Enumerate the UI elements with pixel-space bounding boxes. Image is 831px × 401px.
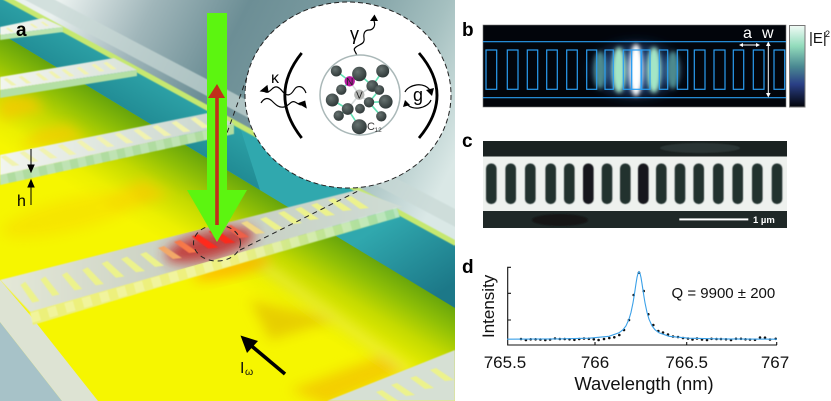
label: a: a bbox=[16, 20, 27, 41]
arrow: current I omega: ω bbox=[245, 366, 253, 378]
data: fitted Lorentzian curve bbox=[507, 272, 777, 339]
icon: right mirror bbox=[419, 53, 437, 138]
diagram: NV centre in diamond lattice: N bbox=[346, 77, 353, 88]
text: kappa: κ bbox=[271, 70, 280, 87]
text: x-axis title: Wavelength (nm) bbox=[574, 373, 714, 394]
scale bar: 1 µm: 1 µm bbox=[753, 215, 775, 226]
arrows: height h bbox=[17, 149, 34, 210]
icon: gamma emission wave bbox=[346, 14, 378, 62]
label: b: b bbox=[462, 20, 474, 41]
scale bar: 1 µm bbox=[679, 215, 775, 226]
panel d: resonance spectrum chart bbox=[479, 267, 789, 394]
text: gamma: γ bbox=[350, 24, 359, 44]
legend: colour bar: 2 bbox=[825, 29, 830, 39]
arrow: green excitation beam bbox=[187, 13, 247, 242]
diagram: blue cavity outline bbox=[483, 42, 786, 98]
callout: zoomed cavity circle bbox=[245, 2, 451, 188]
arrow: red emission beam bbox=[208, 84, 225, 225]
text: x-axis tick labels: 765.5 bbox=[484, 353, 526, 372]
text: x-axis tick labels: 767 bbox=[761, 353, 789, 372]
icon: coupling arrows g: g bbox=[413, 85, 423, 105]
diagram: NV centre in diamond lattice: V bbox=[356, 90, 363, 102]
chart axes bbox=[508, 267, 777, 345]
icon: dashed zoom connector lines bbox=[194, 77, 360, 261]
text: Q value: Q = 9900 ± 200 bbox=[672, 285, 775, 302]
text: x-axis tick labels: 766 bbox=[581, 353, 609, 372]
icon: left mirror bbox=[285, 53, 302, 138]
arrows: height h: h bbox=[17, 193, 26, 210]
arrow: current I omega bbox=[240, 336, 285, 378]
label: c: c bbox=[462, 131, 473, 152]
text: x-axis tick labels: 766.5 bbox=[665, 353, 708, 372]
text and arrows: a, w dimensions bbox=[739, 25, 774, 98]
diagram: NV centre in diamond lattice: 12 bbox=[374, 127, 382, 134]
icon: kappa waves bbox=[261, 86, 308, 109]
micrograph slots bbox=[486, 164, 782, 204]
panel b: simulated field map bbox=[483, 25, 786, 107]
diagram: NV centre in diamond lattice bbox=[320, 55, 400, 135]
diagram: NV centre in diamond lattice: C bbox=[367, 121, 375, 133]
icon: coupling arrows g bbox=[403, 85, 434, 108]
legend: colour bar: |E| bbox=[809, 30, 827, 47]
text: y-axis title: Intensity bbox=[479, 274, 498, 338]
panel c: electron micrograph bbox=[483, 141, 787, 228]
text and arrows: a, w dimensions: w bbox=[761, 25, 774, 42]
chart: field intensity glow bbox=[594, 44, 679, 96]
text: x-axis tick labels bbox=[484, 353, 789, 372]
legend: colour bar bbox=[790, 26, 830, 107]
label: d: d bbox=[462, 257, 474, 278]
data: measured points bbox=[521, 273, 776, 340]
text and arrows: a, w dimensions: a bbox=[743, 25, 752, 42]
arrow: current I omega: I bbox=[240, 360, 244, 377]
